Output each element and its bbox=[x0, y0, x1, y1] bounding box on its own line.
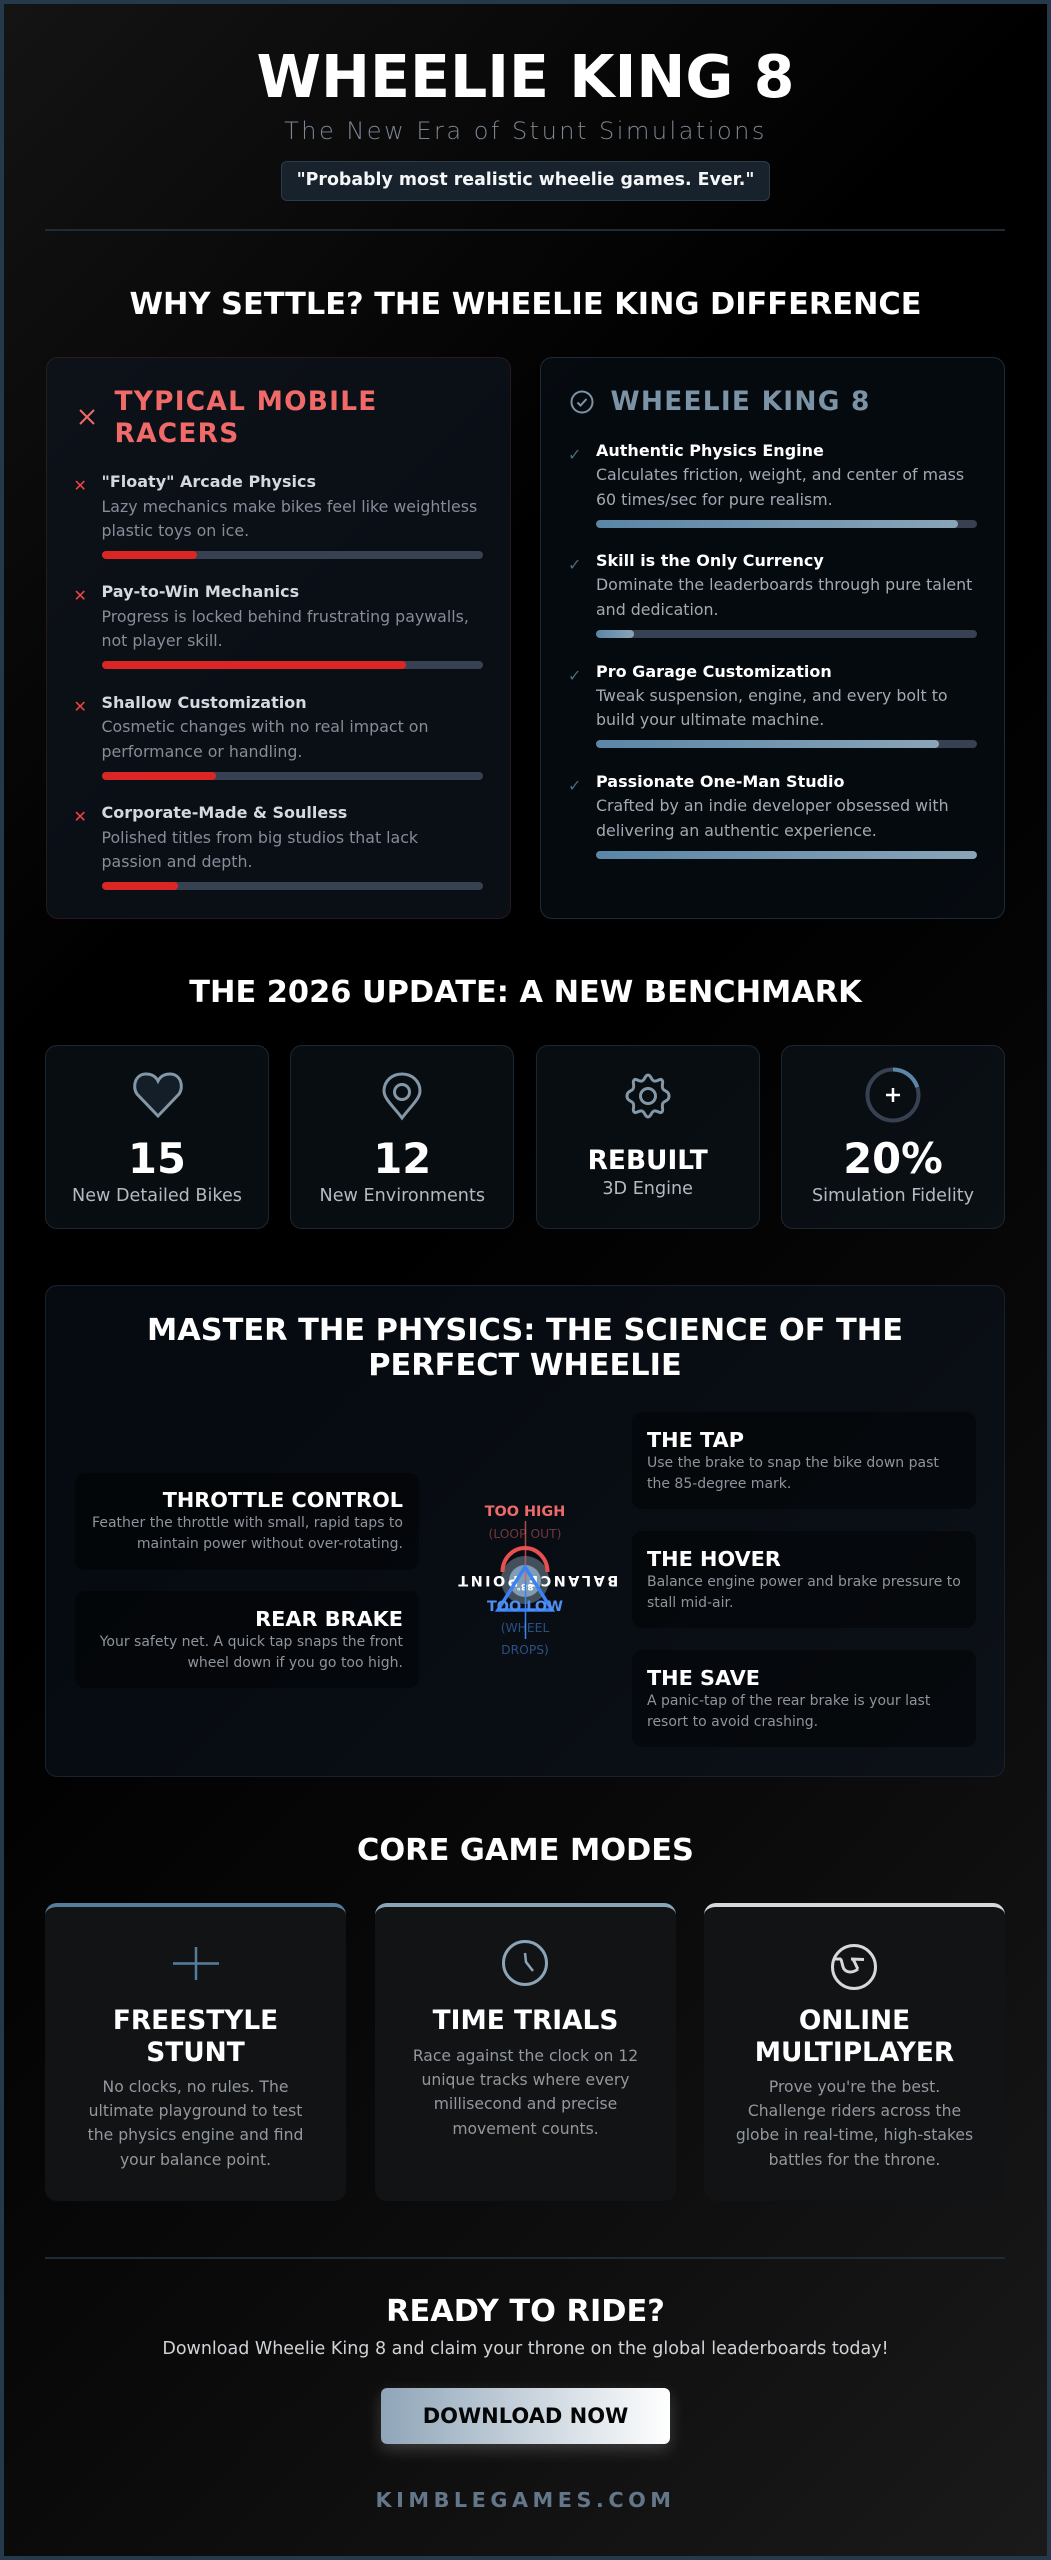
physics heading: PERFECT WHEELIE bbox=[368, 1348, 682, 1383]
panel: typical mobile racers: ✕ bbox=[74, 586, 87, 605]
panel: wheelie king 8: ✓ bbox=[568, 445, 581, 464]
panel: typical mobile racers: ✕ bbox=[74, 697, 87, 716]
heading: core game modes: CORE GAME MODES bbox=[357, 1832, 694, 1868]
item: floaty physics: Lazy mechanics make bikes feel like weightless bbox=[102, 496, 477, 516]
card: throttle control: THROTTLE CONTROL bbox=[163, 1488, 403, 1512]
stat card: rebuilt engine bbox=[536, 1045, 760, 1229]
card: the tap: Use the brake to snap the bike down past bbox=[647, 1455, 939, 1471]
icon: progress ring bbox=[866, 1068, 920, 1122]
stat label: Simulation Fidelity bbox=[812, 1186, 974, 1206]
item: skill currency: and dedication. bbox=[596, 600, 719, 619]
panel: wheelie king 8 bbox=[540, 357, 1005, 919]
item: corporate made: passion and depth. bbox=[102, 852, 252, 871]
card: the tap: the 85-degree mark. bbox=[647, 1476, 791, 1492]
balance point diagram bbox=[456, 1504, 618, 1657]
mode description: the physics engine and find bbox=[88, 2126, 303, 2144]
item: physics engine: Calculates friction, weight, and center of mass bbox=[596, 465, 964, 484]
mode card: online multiplayer bbox=[704, 1903, 1005, 2201]
balance point diagram: 88° bbox=[516, 1581, 534, 1591]
stat label: 3D Engine bbox=[602, 1178, 693, 1198]
stat value: 12 bbox=[373, 1134, 431, 1183]
item: shallow customization: Cosmetic changes with no real impact on bbox=[102, 717, 428, 736]
mode description: millisecond and precise bbox=[434, 2095, 617, 2113]
mode description: Race against the clock on 12 bbox=[413, 2046, 638, 2064]
panel: master the physics bbox=[45, 1285, 1005, 1777]
balance point diagram: DROPS) bbox=[501, 1643, 549, 1657]
mode title: MULTIPLAYER bbox=[755, 2036, 954, 2068]
card: the hover: stall mid-air. bbox=[647, 1595, 733, 1611]
stat label: New Detailed Bikes bbox=[72, 1186, 242, 1206]
item: pay to win: not player skill. bbox=[102, 631, 223, 650]
item: one-man studio bbox=[568, 772, 977, 859]
item: floaty physics bbox=[74, 472, 483, 559]
card: the hover: THE HOVER bbox=[647, 1547, 781, 1571]
download button: DOWNLOAD NOW bbox=[423, 2404, 628, 2428]
panel: wheelie king 8: ✓ bbox=[568, 666, 581, 685]
icon: cross bbox=[79, 409, 95, 425]
item: shallow customization: performance or handling. bbox=[102, 742, 302, 761]
mode title: TIME TRIALS bbox=[433, 2004, 618, 2036]
item: corporate made: Polished titles from big studios that lack bbox=[102, 828, 418, 846]
card: throttle control: maintain power without over-rotating. bbox=[137, 1536, 403, 1552]
panel: typical mobile racers: ✕ bbox=[74, 807, 87, 826]
mode title bbox=[113, 2004, 278, 2068]
mode title: FREESTYLE bbox=[113, 2004, 278, 2036]
panel: wheelie king 8: ✓ bbox=[568, 776, 581, 795]
icon: check circle bbox=[570, 390, 594, 414]
item: shallow customization bbox=[74, 693, 483, 780]
panel: typical mobile racers bbox=[46, 357, 511, 919]
mode description: unique tracks where every bbox=[421, 2071, 630, 2089]
title: WHEELIE KING 8 bbox=[257, 43, 794, 111]
mode description: battles for the throne. bbox=[769, 2151, 940, 2169]
item: pro garage: build your ultimate machine. bbox=[596, 710, 824, 729]
mode title: ONLINE bbox=[799, 2004, 910, 2036]
item: floaty physics: "Floaty" Arcade Physics bbox=[102, 472, 316, 491]
item: shallow customization: Shallow Customization bbox=[102, 693, 307, 712]
item: pay to win: Progress is locked behind frustrating paywalls, bbox=[102, 607, 469, 626]
physics heading bbox=[147, 1313, 903, 1383]
stat value: 20% bbox=[843, 1134, 943, 1183]
panel: typical mobile racers: ✕ bbox=[74, 476, 87, 495]
stat card: bikes bbox=[45, 1045, 269, 1229]
balance point diagram: TOO HIGH bbox=[485, 1504, 565, 1520]
item: physics engine bbox=[568, 441, 977, 528]
call to action text: Download Wheelie King 8 and claim your throne on the global leaderboards today! bbox=[162, 2338, 889, 2358]
card: the tap: THE TAP bbox=[647, 1428, 744, 1452]
card: the save: A panic-tap of the rear brake is your last bbox=[647, 1693, 930, 1709]
card: the tap bbox=[632, 1412, 976, 1509]
mode description: your balance point. bbox=[120, 2151, 271, 2169]
mode card: time trials bbox=[375, 1903, 676, 2201]
icon: heart bbox=[133, 1072, 183, 1118]
panel heading: RACERS bbox=[114, 418, 239, 448]
card: throttle control: Feather the throttle with small, rapid taps to bbox=[92, 1515, 403, 1531]
icon: map pin bbox=[382, 1072, 422, 1120]
heading: 2026 update: THE 2026 UPDATE: A NEW BENCHMARK bbox=[189, 975, 862, 1010]
icon: gear bbox=[626, 1074, 670, 1118]
item: physics engine: Authentic Physics Engine bbox=[596, 441, 824, 460]
item: pro garage: Tweak suspension, engine, and every bolt to bbox=[596, 686, 948, 705]
item: one-man studio: Crafted by an indie developer obsessed with bbox=[596, 796, 949, 815]
download button bbox=[381, 2388, 670, 2444]
balance point diagram: TOO LOW bbox=[487, 1599, 563, 1615]
mode description: Prove you're the best. bbox=[769, 2078, 940, 2096]
mode description bbox=[88, 2078, 303, 2169]
icon: clock bbox=[502, 1940, 548, 1986]
balance point diagram: BALANCE POINT bbox=[456, 1572, 618, 1588]
card: the save: THE SAVE bbox=[647, 1666, 760, 1690]
item: physics engine: 60 times/sec for pure realism. bbox=[596, 490, 833, 509]
mode description bbox=[736, 2078, 973, 2169]
item: skill currency: Skill is the Only Currency bbox=[596, 551, 824, 570]
icon: plus bbox=[173, 1947, 219, 1980]
item: one-man studio: Passionate One-Man Studio bbox=[596, 772, 845, 791]
footer url: KIMBLEGAMES.COM bbox=[376, 2488, 675, 2512]
panel heading: TYPICAL MOBILE bbox=[114, 386, 378, 417]
item: one-man studio: delivering an authentic experience. bbox=[596, 821, 877, 840]
stat value: REBUILT bbox=[588, 1144, 708, 1176]
panel: wheelie king 8: ✓ bbox=[568, 555, 581, 574]
stat card: environments bbox=[290, 1045, 514, 1229]
item: skill currency bbox=[568, 551, 977, 638]
panel heading: WHEELIE KING 8 bbox=[610, 386, 871, 417]
physics heading: MASTER THE PHYSICS: THE SCIENCE OF THE bbox=[147, 1313, 903, 1348]
card: the hover bbox=[632, 1531, 976, 1628]
card: rear brake: REAR BRAKE bbox=[255, 1607, 403, 1631]
quote badge bbox=[281, 161, 770, 201]
mode description bbox=[413, 2046, 638, 2138]
mode title bbox=[755, 2004, 954, 2068]
balance point diagram: (WHEEL bbox=[501, 1621, 549, 1635]
card: the save: resort to avoid crashing. bbox=[647, 1714, 818, 1730]
stat label: New Environments bbox=[320, 1186, 485, 1206]
card: the hover: Balance engine power and brake pressure to bbox=[647, 1574, 961, 1590]
card: rear brake: Your safety net. A quick tap snaps the front bbox=[100, 1634, 403, 1650]
stat card: simulation fidelity bbox=[781, 1045, 1005, 1229]
heading: ready to ride: READY TO RIDE? bbox=[386, 2294, 665, 2329]
stat value: 15 bbox=[128, 1134, 186, 1183]
mode description: movement counts. bbox=[452, 2120, 599, 2138]
item: corporate made: Corporate-Made & Soulless bbox=[102, 803, 347, 822]
item: pro garage bbox=[568, 662, 977, 748]
item: pay to win bbox=[74, 582, 483, 669]
card: the save bbox=[632, 1650, 976, 1747]
quote badge: "Probably most realistic wheelie games. Ever." bbox=[297, 170, 754, 190]
panel heading bbox=[114, 386, 378, 448]
balance point diagram: (LOOP OUT) bbox=[489, 1527, 561, 1541]
mode card: freestyle stunt bbox=[45, 1903, 346, 2201]
mode description: globe in real-time, high-stakes bbox=[736, 2126, 973, 2144]
item: floaty physics: plastic toys on ice. bbox=[102, 521, 249, 540]
mode description: Challenge riders across the bbox=[748, 2102, 961, 2120]
mode description: ultimate playground to test bbox=[89, 2102, 302, 2120]
mode title: STUNT bbox=[146, 2036, 245, 2068]
item: pay to win: Pay-to-Win Mechanics bbox=[102, 582, 299, 601]
card: rear brake bbox=[75, 1591, 419, 1688]
item: skill currency: Dominate the leaderboards through pure talent bbox=[596, 575, 972, 594]
icon: online circle bbox=[831, 1944, 877, 1990]
heading: why settle: WHY SETTLE? THE WHEELIE KING DIFFERENCE bbox=[130, 287, 921, 322]
card: rear brake: wheel down if you go too high. bbox=[187, 1655, 403, 1671]
subtitle: The New Era of Stunt Simulations bbox=[284, 117, 767, 145]
item: corporate made bbox=[74, 803, 483, 890]
mode description: No clocks, no rules. The bbox=[103, 2078, 288, 2096]
card: throttle control bbox=[75, 1473, 419, 1570]
item: pro garage: Pro Garage Customization bbox=[596, 662, 832, 681]
